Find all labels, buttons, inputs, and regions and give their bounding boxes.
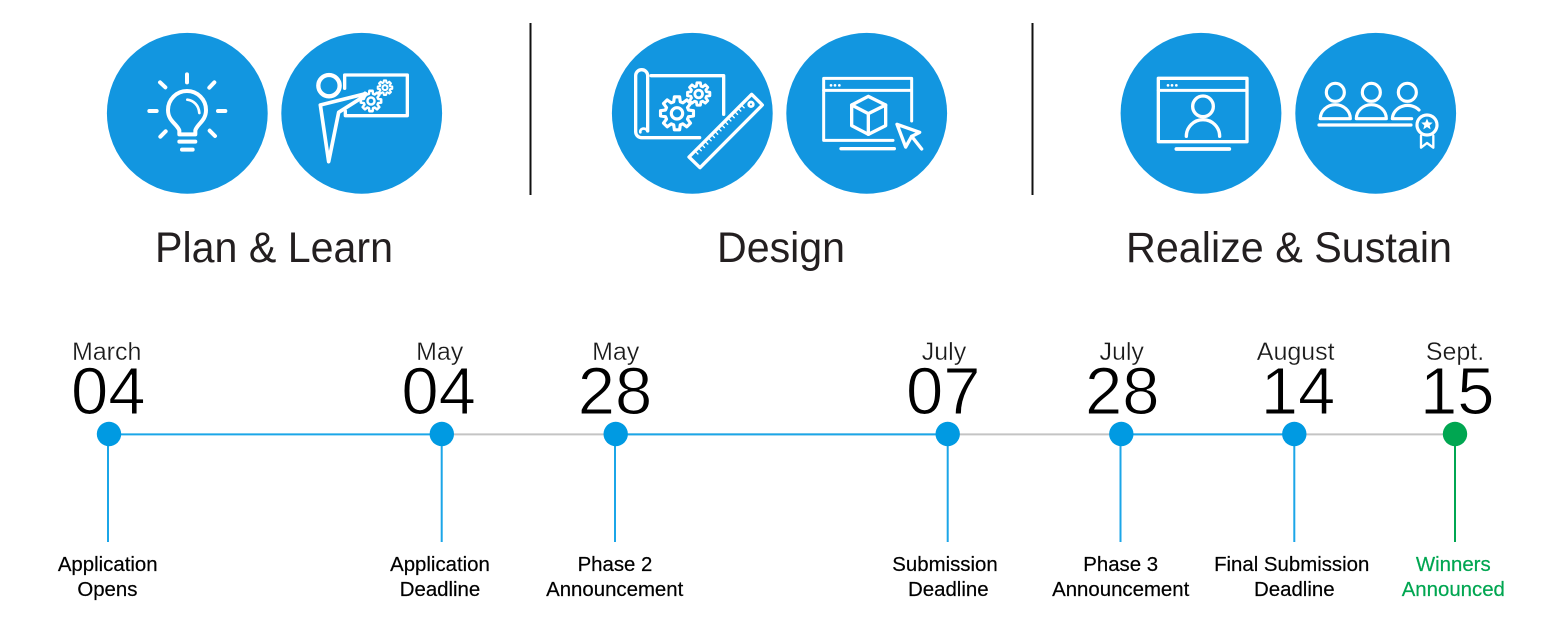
icon: window with cube and cursor bbox=[786, 33, 947, 194]
milestone: July 28 Phase 3 Announcement: July bbox=[1099, 338, 1144, 366]
milestone: March 04 Application Opens bbox=[58, 338, 158, 601]
milestone: May 04 Application Deadline: Deadline bbox=[400, 579, 480, 601]
milestone: July 28 Phase 3 Announcement: Announcement bbox=[1052, 579, 1190, 601]
heading: Realize & Sustain: Realize & Sustain bbox=[1126, 225, 1452, 272]
milestone: July 07 Submission Deadline: Submission bbox=[892, 554, 998, 576]
milestone: Sept. 15 Winners Announced: 15 bbox=[1420, 354, 1495, 429]
milestone: March 04 Application Opens: March bbox=[72, 338, 141, 366]
milestone: March 04 Application Opens: 04 bbox=[71, 354, 146, 429]
milestone: July 28 Phase 3 Announcement: 28 bbox=[1085, 354, 1160, 429]
milestone: May 28 Phase 2 Announcement: 28 bbox=[578, 354, 652, 429]
icon: team with award ribbon bbox=[1295, 33, 1456, 194]
timeline bbox=[58, 338, 1505, 601]
icon: blueprint with ruler bbox=[612, 33, 773, 194]
milestone: Sept. 15 Winners Announced: Winners bbox=[1416, 554, 1491, 576]
divider one bbox=[530, 23, 532, 195]
milestone: July 28 Phase 3 Announcement: Phase 3 bbox=[1083, 554, 1158, 576]
milestone: March 04 Application Opens: Application bbox=[58, 554, 158, 576]
milestone: July 07 Submission Deadline: 07 bbox=[906, 354, 981, 429]
timeline axis bbox=[109, 433, 1456, 435]
milestone: July 28 Phase 3 Announcement bbox=[1052, 338, 1190, 601]
milestone: Sept. 15 Winners Announced: Announced bbox=[1402, 579, 1505, 601]
milestone: March 04 Application Opens: Opens bbox=[77, 579, 137, 601]
milestone: May 04 Application Deadline bbox=[390, 338, 490, 601]
milestone: May 28 Phase 2 Announcement: May bbox=[592, 338, 640, 366]
icon: window with person bbox=[1121, 33, 1281, 194]
milestone: July 07 Submission Deadline bbox=[892, 338, 998, 601]
icon: light bulb bbox=[107, 33, 268, 194]
milestone: Sept. 15 Winners Announced bbox=[1402, 338, 1505, 601]
milestone: August 14 Final Submission Deadline: 14 bbox=[1261, 354, 1335, 429]
milestone: Sept. 15 Winners Announced: Sept. bbox=[1426, 338, 1484, 366]
panel: Plan & Learn bbox=[107, 33, 442, 272]
milestone: May 04 Application Deadline: 04 bbox=[401, 354, 476, 429]
milestone: May 04 Application Deadline: May bbox=[416, 338, 464, 366]
panel: Realize & Sustain bbox=[1121, 33, 1456, 272]
milestone: May 28 Phase 2 Announcement: Announcement bbox=[546, 579, 684, 601]
milestone: August 14 Final Submission Deadline: Final Submission bbox=[1214, 554, 1369, 576]
milestone: May 28 Phase 2 Announcement bbox=[546, 338, 684, 601]
panel: Design bbox=[612, 33, 947, 272]
milestone: August 14 Final Submission Deadline bbox=[1214, 338, 1369, 601]
milestone: August 14 Final Submission Deadline: Deadline bbox=[1254, 579, 1335, 601]
milestone: May 28 Phase 2 Announcement: Phase 2 bbox=[578, 554, 652, 576]
icon: presenter at board with gears bbox=[281, 33, 442, 194]
milestone: July 07 Submission Deadline: Deadline bbox=[908, 579, 989, 601]
divider two bbox=[1032, 23, 1034, 195]
milestone: July 07 Submission Deadline: July bbox=[922, 338, 967, 366]
milestone: May 04 Application Deadline: Application bbox=[390, 554, 490, 576]
milestone: August 14 Final Submission Deadline: August bbox=[1257, 338, 1335, 366]
heading: Plan & Learn: Plan & Learn bbox=[155, 225, 393, 272]
heading: Design: Design bbox=[717, 225, 845, 272]
